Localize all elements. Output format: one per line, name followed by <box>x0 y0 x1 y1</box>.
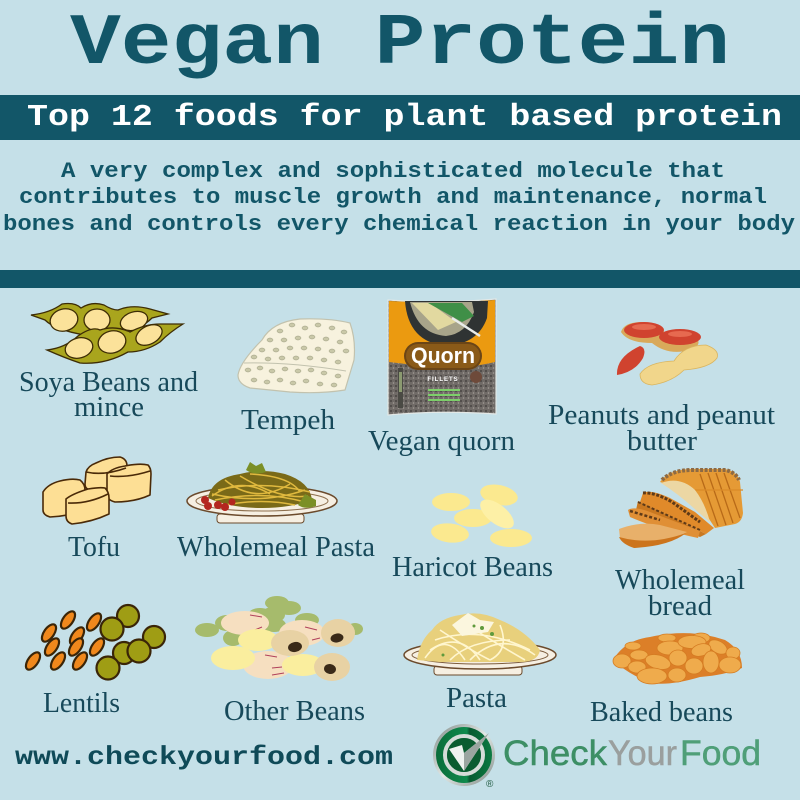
intro text: bones and controls every chemical reaction in your body <box>3 212 795 237</box>
logo wordmark: Your <box>608 734 677 773</box>
label: other beans: Other Beans <box>224 696 365 727</box>
label: wholemeal bread <box>615 565 745 622</box>
icon: quorn pack <box>388 299 496 415</box>
intro text: A very complex and sophisticated molecule that <box>61 159 725 184</box>
label: soya beans: Soya Beans and <box>19 367 198 398</box>
icon: baked beans <box>613 633 742 684</box>
icon: lentils and peas <box>23 605 165 680</box>
label: quorn: Vegan quorn <box>368 426 515 457</box>
icon: quorn pack: FILLETS <box>427 377 459 383</box>
icon: other beans <box>195 596 363 681</box>
label: tofu: Tofu <box>68 532 120 563</box>
subtitle band: Top 12 foods for plant based protein <box>27 100 782 135</box>
website url: www.checkyourfood.com <box>15 742 393 772</box>
subtitle band <box>0 95 800 140</box>
label: peanuts: Peanuts and peanut <box>548 400 775 431</box>
label: wholemeal pasta: Wholemeal Pasta <box>177 532 376 563</box>
label: lentils: Lentils <box>43 688 120 719</box>
label: peanuts: butter <box>627 426 698 457</box>
intro text: contributes to muscle growth and maintenance, normal <box>19 185 767 210</box>
label: tempeh: Tempeh <box>241 405 335 436</box>
label: soya beans <box>19 367 198 423</box>
logo badge <box>433 724 495 790</box>
logo badge: ® <box>486 779 494 790</box>
icon: tofu <box>43 457 151 524</box>
icon: soya beans <box>31 304 183 363</box>
label: peanuts <box>548 400 775 457</box>
logo wordmark: Food <box>680 734 761 773</box>
label: wholemeal bread: bread <box>648 591 712 622</box>
label: pasta: Pasta <box>446 683 508 714</box>
icon: wholemeal pasta <box>187 462 337 523</box>
label: baked beans: Baked beans <box>590 697 733 728</box>
icon: peanuts <box>617 322 718 385</box>
icon: pasta <box>404 613 556 675</box>
logo wordmark: Check <box>503 734 608 773</box>
divider band <box>0 270 800 288</box>
logo wordmark <box>503 734 761 773</box>
label: wholemeal bread: Wholemeal <box>615 565 745 596</box>
logo: check your food <box>433 724 761 790</box>
icon: bread <box>619 469 743 548</box>
icon: tempeh <box>238 319 354 393</box>
intro text <box>3 159 795 237</box>
icon: quorn pack: Quorn <box>411 343 475 368</box>
icon: haricot beans <box>430 481 532 547</box>
label: haricot beans: Haricot Beans <box>392 552 553 583</box>
title: Vegan Protein <box>70 3 730 85</box>
label: soya beans: mince <box>74 392 144 423</box>
